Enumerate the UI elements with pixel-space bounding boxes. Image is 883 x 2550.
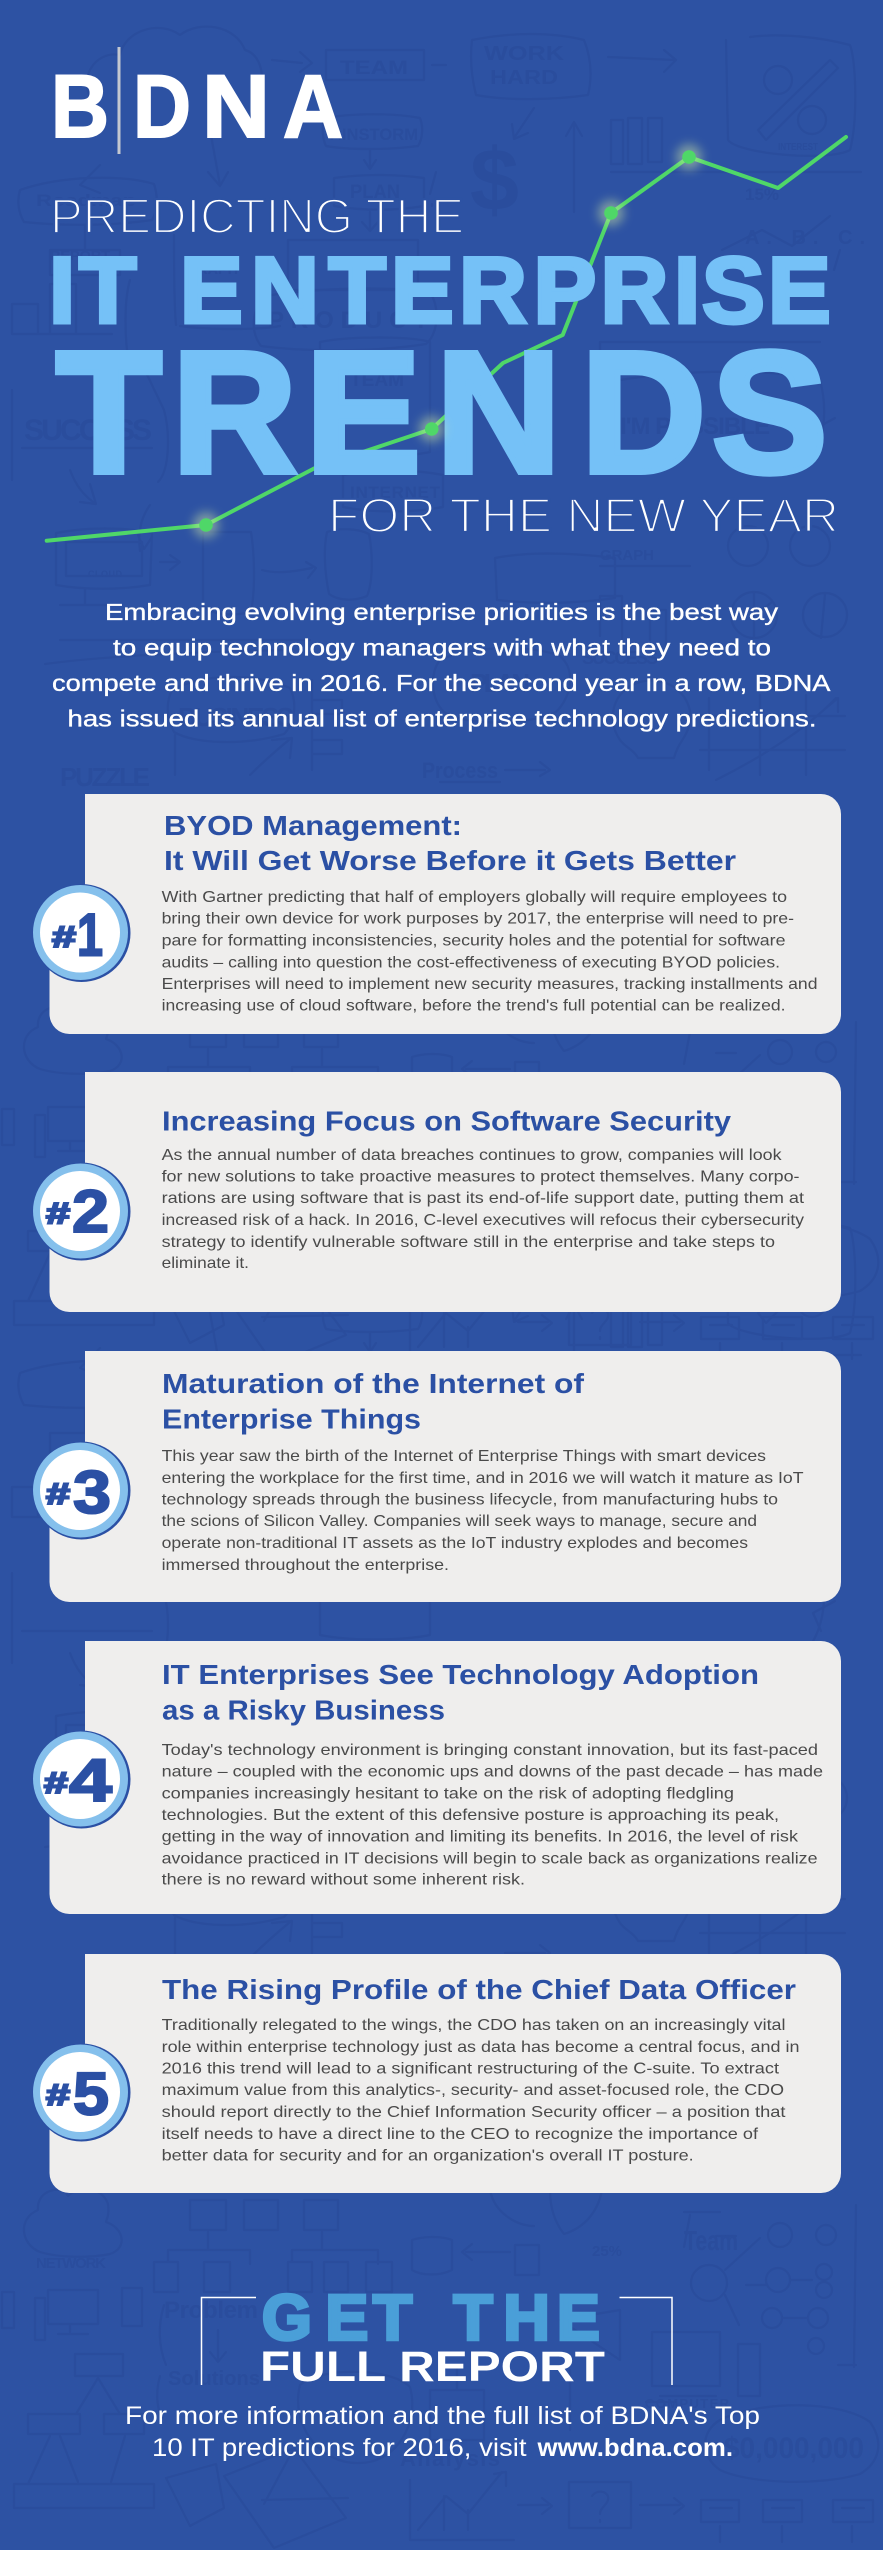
background doodles: PRODUCT bbox=[268, 307, 428, 334]
badge: #3 bbox=[32, 1442, 130, 1540]
body text: operate non-traditional IT assets as the IoT industry explodes and becomes bbox=[162, 1535, 748, 1552]
trend line bbox=[47, 137, 846, 541]
background doodles: COMPUTER bbox=[645, 2396, 730, 2411]
title bbox=[49, 190, 839, 543]
background doodles: Team bbox=[684, 2225, 738, 2256]
background doodles: PLAN bbox=[470, 668, 530, 698]
background doodles: Solutions bbox=[168, 2368, 260, 2390]
body text: immersed throughout the enterprise. bbox=[162, 1557, 449, 1574]
badge: #1: 1 bbox=[77, 902, 103, 968]
heading: as a Risky Business bbox=[162, 1695, 445, 1726]
body text bbox=[162, 1147, 805, 1272]
body text bbox=[162, 2017, 800, 2164]
body text: audits – calling into question the cost-effectiveness of executing BYOD policies. bbox=[162, 954, 780, 972]
heading: get the: GET THE bbox=[262, 2282, 600, 2354]
body text: maximum value from this analytics-, security- and asset-focused role, the CDO bbox=[162, 2082, 784, 2099]
background doodles: INTEREST bbox=[778, 142, 818, 153]
background doodles: TEAM bbox=[340, 58, 408, 79]
body text: should report directly to the Chief Information Security officer – a position that bbox=[162, 2104, 786, 2121]
logo: BDNA: D bbox=[133, 56, 191, 156]
background doodles: REPORT bbox=[50, 248, 110, 263]
body text: role within enterprise technology just as data has become a central focus, and in bbox=[162, 2039, 800, 2056]
body text: Today's technology environment is bringing constant innovation, but its fast-paced bbox=[162, 1742, 818, 1759]
body text bbox=[162, 1742, 823, 1888]
body text: This year saw the birth of the Internet of Enterprise Things with smart devices bbox=[162, 1448, 766, 1465]
heading: IT Enterprises See Technology Adoption bbox=[162, 1659, 759, 1690]
background doodles: NETWORK bbox=[36, 2255, 106, 2272]
body text: there is no reward without some inherent risk. bbox=[162, 1872, 525, 1888]
heading bbox=[162, 1659, 759, 1726]
heading: Enterprise Things bbox=[162, 1404, 421, 1435]
intro text: to equip technology managers with what they need to bbox=[113, 634, 771, 660]
background doodles: Roadmap bbox=[36, 191, 136, 210]
panel: prediction 4 bbox=[32, 1641, 841, 1914]
logo: BDNA: B bbox=[51, 56, 109, 156]
body text: itself needs to have a direct line to the CEO to recognize the importance of bbox=[162, 2126, 759, 2143]
heading: BYOD Management: bbox=[164, 810, 462, 841]
badge: #1 bbox=[32, 884, 130, 982]
background doodles: INTERNET bbox=[350, 483, 441, 502]
title: PREDICTING THE bbox=[50, 190, 464, 244]
body text: eliminate it. bbox=[162, 1255, 249, 1272]
background doodles: CLOUD bbox=[88, 569, 122, 579]
logo: BDNA: A bbox=[283, 56, 343, 156]
body text: nature – coupled with the economic ups and downs of the past decade – has made bbox=[162, 1764, 823, 1781]
body text: entering the workplace for the first time, and in 2016 we will watch it mature as IoT bbox=[162, 1470, 804, 1487]
panel: prediction 1 bbox=[32, 794, 841, 1034]
badge: #5: 5 bbox=[73, 2060, 109, 2128]
badge: #2: 2 bbox=[72, 1178, 109, 1245]
body text: increasing use of cloud software, before the trend's full potential can be realized. bbox=[162, 998, 786, 1014]
badge: #2: # bbox=[46, 1198, 70, 1230]
body text: pare for formatting inconsistencies, security holes and the potential for software bbox=[162, 932, 786, 949]
body text: With Gartner predicting that half of employers globally will require employees to bbox=[162, 889, 787, 906]
body text: the scions of Silicon Valley. Companies will seek ways to manage, secure and bbox=[162, 1513, 757, 1530]
logo: BDNA bbox=[51, 47, 343, 156]
body text: increased risk of a hack. In 2016, C-level executives will refocus their cybersecurity bbox=[162, 1212, 804, 1229]
heading: It Will Get Worse Before it Gets Better bbox=[164, 845, 736, 876]
intro text: has issued its annual list of enterprise technology predictions. bbox=[68, 706, 816, 732]
body text: getting in the way of innovation and limiting its benefits. In 2016, the level of risk bbox=[162, 1828, 798, 1846]
background doodles: Analysis bbox=[400, 2446, 500, 2471]
logo: BDNA: N bbox=[202, 56, 270, 156]
background doodles: SUCCESS bbox=[582, 648, 658, 668]
body text: rations are using software that is past its end-of-life support date, putting them at bbox=[162, 1190, 805, 1207]
body text: bring their own device for work purposes by 2017, the enterprise will need to pre- bbox=[162, 911, 794, 928]
heading: Increasing Focus on Software Security bbox=[162, 1106, 732, 1137]
background doodles: WORK bbox=[484, 43, 565, 65]
heading bbox=[164, 810, 736, 876]
badge: #5 bbox=[32, 2044, 130, 2142]
bracket frame bbox=[202, 2298, 672, 2385]
background doodles: $0,000,000 bbox=[724, 2432, 864, 2465]
trend line markers bbox=[193, 144, 702, 538]
body text bbox=[162, 889, 818, 1014]
footer text: 10 IT predictions for 2016, visit bbox=[152, 2435, 527, 2462]
background doodles: SUCCESS bbox=[24, 414, 152, 447]
footer text: For more information and the full list of BDNA's Top bbox=[125, 2403, 760, 2430]
badge: #2 bbox=[32, 1162, 130, 1260]
background doodles: A. B. C. bbox=[745, 227, 865, 249]
panel: prediction 2 bbox=[32, 1072, 841, 1312]
body text: Enterprises will need to implement new security measures, tracking installments and bbox=[162, 976, 818, 993]
background doodles: GRAPH bbox=[600, 547, 654, 564]
badge: #4 bbox=[32, 1730, 130, 1828]
title: TRENDS bbox=[56, 315, 827, 509]
body text: strategy to identify vulnerable software still in the enterprise and take steps to bbox=[162, 1234, 775, 1251]
heading: full report: FULL REPORT bbox=[260, 2344, 605, 2391]
title: FOR THE NEW YEAR bbox=[328, 490, 839, 543]
body text: for new solutions to take proactive measures to protect themselves. Many corpo- bbox=[162, 1168, 800, 1185]
background doodles: I'M POSSIBLE bbox=[620, 413, 770, 440]
heading: Maturation of the Internet of bbox=[162, 1368, 585, 1399]
background doodles: HARD bbox=[490, 67, 558, 89]
badge: #3: 3 bbox=[73, 1459, 111, 1526]
background doodles: TEAM bbox=[350, 370, 404, 390]
badge: #5: # bbox=[46, 2079, 70, 2112]
badge: #1: # bbox=[52, 921, 76, 954]
intro text: compete and thrive in 2016. For the second year in a row, BDNA bbox=[52, 670, 831, 696]
heading: The Rising Profile of the Chief Data Officer bbox=[162, 1974, 796, 2005]
background doodles: 25% bbox=[592, 2243, 622, 2260]
body text: technologies. But the extent of this defensive posture is approaching its peak, bbox=[162, 1807, 779, 1824]
badge: #3: # bbox=[46, 1478, 70, 1511]
body text: As the annual number of data breaches continues to grow, companies will look bbox=[162, 1147, 782, 1164]
footer text: www.bdna.com. bbox=[536, 2435, 733, 2462]
intro text bbox=[52, 599, 831, 732]
body text bbox=[162, 1448, 804, 1574]
intro text: Embracing evolving enterprise priorities is the best way bbox=[105, 599, 778, 625]
body text: 2016 this trend will lead to a significant restructuring of the C-suite. To extract bbox=[162, 2060, 780, 2078]
title: IT ENTERPRISE bbox=[49, 238, 831, 342]
background doodles: BUSINESS bbox=[178, 702, 294, 732]
footer text bbox=[125, 2403, 760, 2462]
background doodles: PUZZLE bbox=[60, 762, 150, 792]
body text: avoidance practiced in IT decisions will begin to scale back as organizations realize bbox=[162, 1850, 818, 1868]
background doodles: $ bbox=[470, 130, 519, 229]
badge: #4: 4 bbox=[69, 1747, 113, 1814]
body text: better data for security and for an organization's overall IT posture. bbox=[162, 2148, 694, 2164]
body text: Traditionally relegated to the wings, the CDO has taken on an increasingly vital bbox=[162, 2017, 786, 2034]
body text: technology spreads through the business lifecycle, from manufacturing hubs to bbox=[162, 1492, 778, 1508]
background doodles: AINSTORM bbox=[330, 125, 418, 144]
badge: #4: # bbox=[44, 1767, 68, 1800]
panel: prediction 3 bbox=[32, 1351, 841, 1602]
background doodles: 15% bbox=[745, 185, 779, 204]
heading bbox=[162, 1368, 585, 1435]
body text: companies increasingly hesitant to take on the risk of adopting fledgling bbox=[162, 1785, 734, 1802]
background doodles: Problem bbox=[164, 2297, 258, 2324]
call to action bbox=[125, 2282, 760, 2462]
background doodles: GRAPH bbox=[186, 262, 238, 277]
background doodles: Process bbox=[422, 758, 498, 783]
panel: prediction 5 bbox=[32, 1954, 841, 2193]
background doodles: PLAN bbox=[350, 182, 400, 203]
